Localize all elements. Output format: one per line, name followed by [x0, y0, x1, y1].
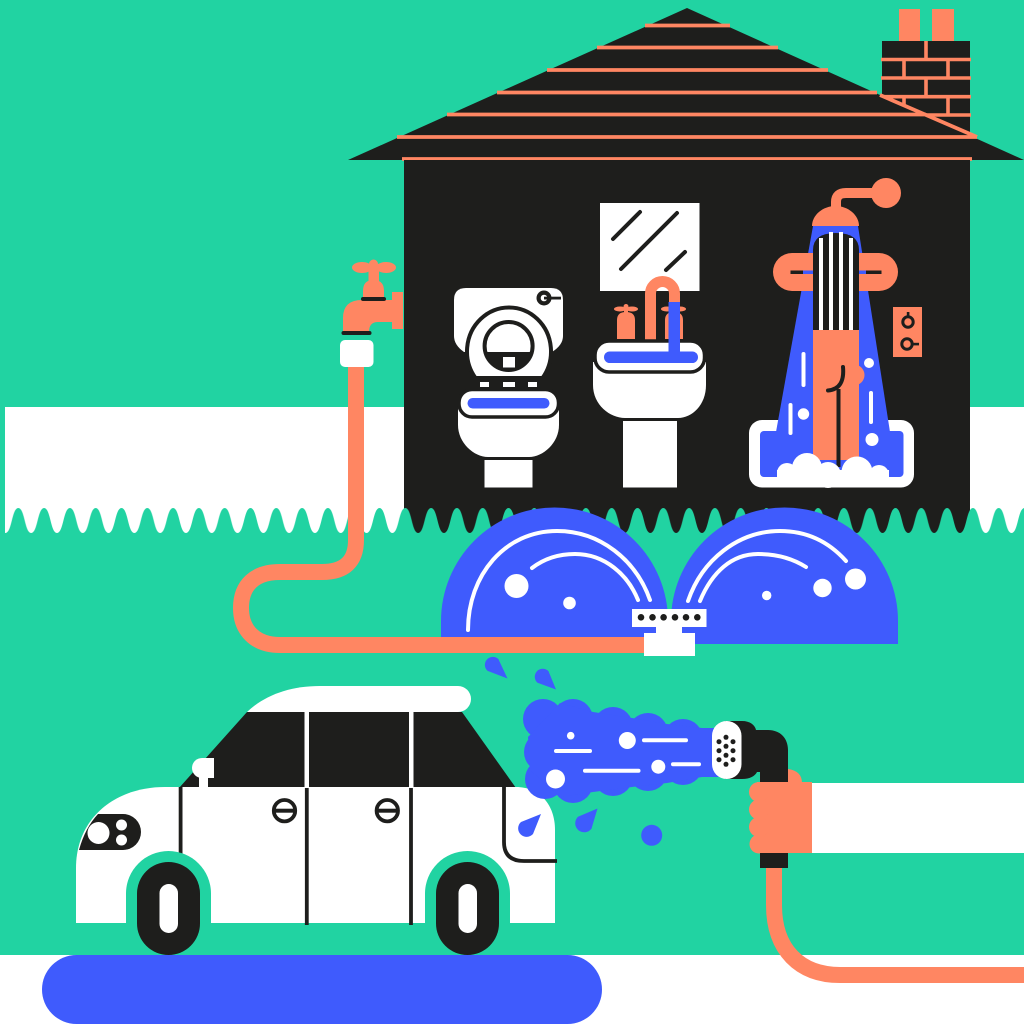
shower control plate	[893, 307, 922, 357]
spray nozzle	[712, 721, 788, 785]
white ground band	[0, 955, 1024, 1024]
shower	[749, 178, 914, 488]
outdoor tap	[342, 260, 403, 335]
house body	[404, 160, 970, 535]
sprinkler head	[632, 609, 706, 656]
icon: door handle rear	[377, 800, 398, 821]
water dome left	[441, 507, 668, 637]
scalloped grass edge	[0, 504, 1024, 536]
front wheel	[126, 851, 211, 955]
white wall band	[5, 407, 1024, 535]
hose collar	[760, 853, 788, 868]
right garden hose	[774, 866, 1024, 975]
puddle	[42, 955, 602, 1024]
spray jet	[523, 699, 725, 803]
car	[76, 686, 557, 955]
hose connector nut	[340, 340, 374, 367]
chimney	[881, 9, 971, 141]
wing mirror	[192, 758, 214, 788]
bathroom mirror	[600, 203, 700, 291]
rear wheel	[425, 851, 510, 955]
sprinkler droplets	[485, 657, 556, 690]
sink	[593, 282, 706, 488]
garden hose to sprinkler	[241, 364, 646, 645]
house roof	[348, 8, 1024, 160]
hand holding nozzle	[749, 769, 812, 854]
toilet	[454, 288, 563, 488]
headlight	[79, 814, 141, 850]
sleeve	[812, 783, 1024, 853]
spray droplets	[518, 808, 662, 846]
water dome right	[671, 507, 898, 644]
icon: door handle front	[274, 800, 295, 821]
